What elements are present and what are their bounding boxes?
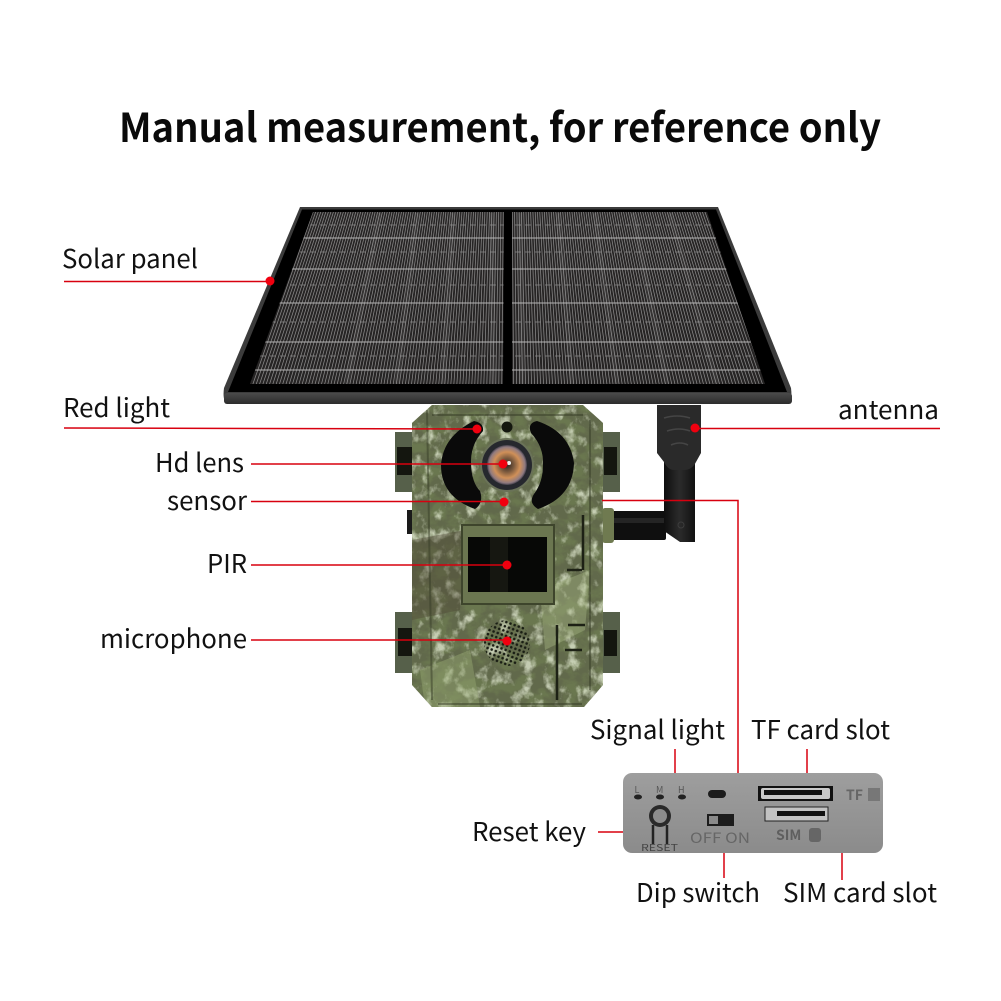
dip switch: OFF ON bbox=[690, 828, 750, 848]
callout: TF card slot bbox=[751, 710, 890, 773]
indicator LEDs bbox=[634, 783, 686, 800]
SIM slot bbox=[765, 807, 828, 845]
camera body bbox=[405, 400, 610, 712]
callout: microphone bbox=[100, 619, 512, 656]
callout: reset key: Reset key bbox=[472, 812, 586, 849]
callout: solar panel bbox=[62, 239, 274, 286]
callout: signal light bbox=[590, 710, 725, 773]
callout: antenna bbox=[690, 390, 940, 432]
solar panel bbox=[224, 207, 792, 404]
callout: Hd lens: Hd lens bbox=[155, 443, 244, 480]
panel frame bbox=[224, 207, 791, 404]
callout: TF card slot: TF card slot bbox=[751, 710, 890, 747]
reset button bbox=[641, 805, 679, 854]
antenna arm bbox=[612, 511, 666, 540]
callout: sensor bbox=[167, 481, 508, 518]
callout: SIM card slot: SIM card slot bbox=[783, 873, 937, 910]
microphone grille bbox=[484, 620, 530, 666]
antenna stem bbox=[664, 462, 695, 542]
SIM slot: SIM bbox=[776, 825, 801, 845]
callout: sensor: sensor bbox=[167, 481, 248, 518]
title: Manual measurement, for reference only bbox=[119, 96, 881, 154]
callout: dip switch bbox=[636, 853, 760, 910]
antenna bbox=[602, 405, 701, 543]
indicator LEDs: H bbox=[678, 783, 685, 796]
silver control panel bbox=[623, 773, 883, 854]
light sensor dot bbox=[502, 422, 512, 432]
camouflage texture bbox=[405, 400, 610, 712]
TF slot bbox=[758, 785, 880, 805]
callout: solar panel: Solar panel bbox=[62, 239, 198, 276]
TF slot: TF bbox=[846, 785, 863, 805]
callout: signal light: Signal light bbox=[590, 710, 725, 747]
reset button: RESET bbox=[641, 841, 679, 854]
connector line to control panel bbox=[602, 500, 738, 773]
right IR crescent bbox=[530, 421, 574, 509]
callout: Hd lens bbox=[155, 443, 508, 480]
indicator LEDs: M bbox=[656, 783, 663, 796]
callout: PIR bbox=[207, 544, 512, 581]
callout: red light: Red light bbox=[63, 388, 170, 425]
right cell bbox=[512, 212, 765, 384]
PIR window bbox=[462, 525, 554, 604]
left cell bbox=[250, 212, 504, 384]
camera straps bbox=[395, 432, 620, 673]
callout: microphone: microphone bbox=[100, 619, 247, 656]
callout: dip switch: Dip switch bbox=[636, 873, 760, 910]
callout: PIR: PIR bbox=[207, 544, 247, 581]
lens bbox=[480, 438, 534, 492]
callout: red light bbox=[63, 388, 482, 434]
left IR crescent bbox=[441, 421, 483, 509]
indicator LEDs: L bbox=[634, 783, 640, 796]
dip switch bbox=[690, 814, 750, 848]
status slot bbox=[708, 790, 726, 798]
antenna grip bbox=[657, 405, 701, 470]
callout: antenna: antenna bbox=[838, 390, 939, 427]
antenna connector bbox=[602, 508, 614, 543]
